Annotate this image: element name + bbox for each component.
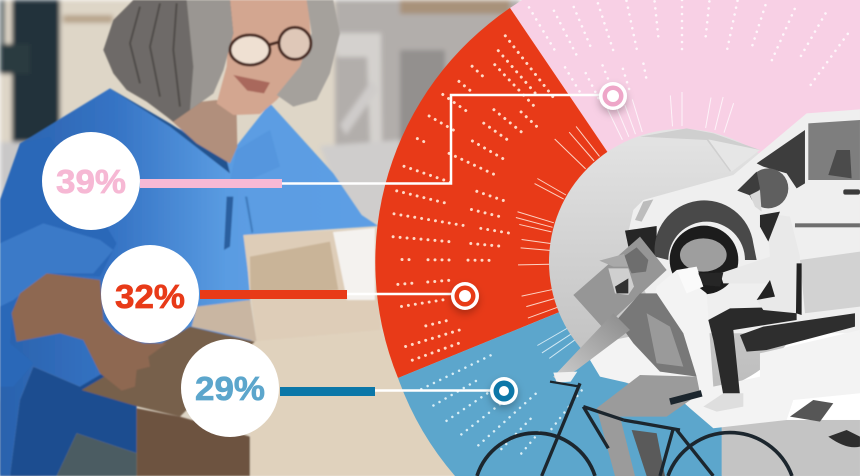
callout 39% xyxy=(42,82,627,230)
blue segment burst xyxy=(537,328,585,370)
leader bar pink xyxy=(140,179,282,188)
parcel box xyxy=(82,228,457,476)
bicycle xyxy=(477,382,792,476)
pie: pink segment 39% xyxy=(510,0,860,262)
blue segment dot rows xyxy=(421,355,582,454)
grey ground xyxy=(722,420,860,476)
red segment burst xyxy=(516,126,600,318)
value 39%: 39% xyxy=(56,163,126,200)
value circle 32% xyxy=(101,245,199,343)
leader line to pink node xyxy=(282,95,600,184)
value 29%: 29% xyxy=(195,370,265,407)
grey photo disc with delivery workers xyxy=(477,109,860,476)
node blue xyxy=(490,377,518,405)
value circle 39% xyxy=(42,132,140,230)
value 32%: 32% xyxy=(115,278,185,315)
delivery van xyxy=(625,109,860,333)
callout 32% xyxy=(101,245,479,343)
pink segment dot rows xyxy=(514,0,848,100)
red segment dot rows xyxy=(393,36,556,360)
pie: red segment 32% xyxy=(375,8,682,378)
pink segment burst xyxy=(607,92,734,140)
hand xyxy=(12,273,167,391)
value circle 29% xyxy=(181,339,279,437)
leader line to blue node xyxy=(375,389,492,392)
parcel held by cyclist xyxy=(573,237,667,328)
node red xyxy=(451,282,479,310)
leader line to red node xyxy=(347,293,452,295)
leader bar red xyxy=(200,290,347,299)
callout 29% xyxy=(181,339,518,437)
scooter xyxy=(590,270,860,447)
parcel label xyxy=(333,228,375,300)
background car bonnet xyxy=(640,128,760,172)
motorbike rider xyxy=(677,168,802,412)
delivery box on scooter xyxy=(800,252,860,313)
blue shirt xyxy=(0,88,378,476)
cyclist xyxy=(553,247,700,476)
leader bar blue xyxy=(280,387,375,396)
room background xyxy=(0,0,520,476)
node pink xyxy=(599,82,627,110)
photo: woman opening a parcel xyxy=(0,0,520,476)
neck, face and hair xyxy=(103,0,340,163)
pie: blue segment 29% xyxy=(398,262,722,476)
